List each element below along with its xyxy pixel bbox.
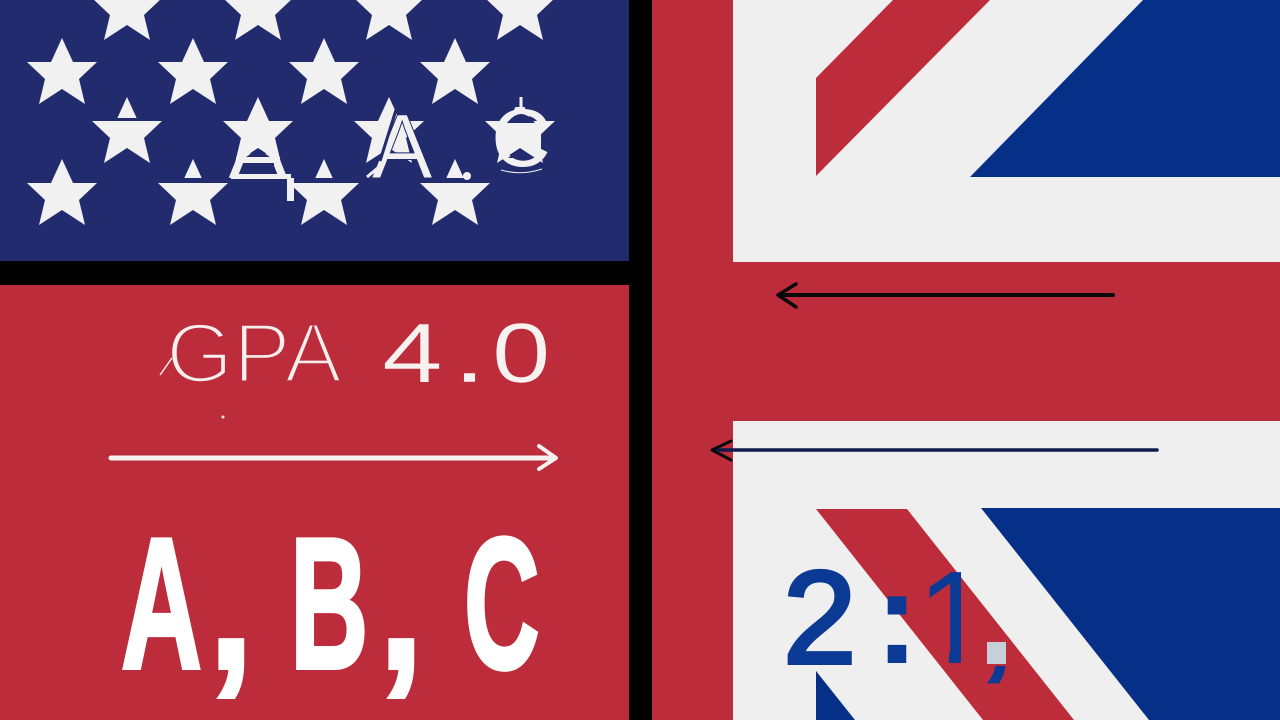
small blue triangle bbox=[816, 671, 855, 720]
arrow: upper left bbox=[778, 284, 1113, 307]
value: 4.0: 0 bbox=[492, 307, 550, 401]
lower white field bbox=[733, 421, 1280, 720]
value: 4.0: . bbox=[452, 306, 487, 400]
letter grades: A, B, C: , bbox=[209, 499, 253, 708]
garbled letter A, second: A bbox=[371, 96, 433, 198]
garbled letter C: C bbox=[491, 93, 551, 184]
dot bbox=[222, 416, 224, 418]
value: 4.0 bbox=[382, 306, 550, 401]
UK degree: 2:1,: : bbox=[875, 544, 919, 691]
heading: GPA: GPA bbox=[166, 306, 342, 400]
arrow: right bbox=[111, 446, 556, 469]
letter grades: A, B, C: B bbox=[290, 500, 368, 708]
value: 4.0: 4 bbox=[382, 306, 443, 400]
star gaps bbox=[110, 94, 545, 183]
upper white field bbox=[733, 0, 1280, 262]
letter grades: A, B, C: A bbox=[121, 498, 202, 708]
panel: US flag stars on navy bbox=[0, 0, 629, 261]
UK degree: 2:1, bbox=[788, 568, 1006, 684]
letter grades: A, B, C bbox=[121, 498, 540, 709]
letter grades: A, B, C: C bbox=[464, 500, 540, 709]
UK degree: 2:1,: 1 bbox=[917, 544, 990, 691]
panel: US grading on red bbox=[0, 285, 629, 720]
panel: UK flag bbox=[652, 0, 1280, 720]
small dot bbox=[463, 172, 471, 180]
UK degree: 2:1,: 2 bbox=[783, 544, 856, 691]
star field bbox=[27, 0, 555, 225]
UK degree: 2:1,: , bbox=[978, 544, 1015, 691]
garbled letter A, first: A bbox=[229, 98, 288, 197]
arrow: lower left bbox=[712, 441, 1157, 460]
lower red diagonal bbox=[816, 509, 1074, 720]
letter grades: A, B, C: , bbox=[379, 499, 423, 708]
upper blue triangle bbox=[970, 0, 1280, 177]
lower blue field bbox=[981, 508, 1280, 720]
upper red diagonal bbox=[816, 0, 990, 176]
grey comma head bbox=[987, 642, 1006, 664]
